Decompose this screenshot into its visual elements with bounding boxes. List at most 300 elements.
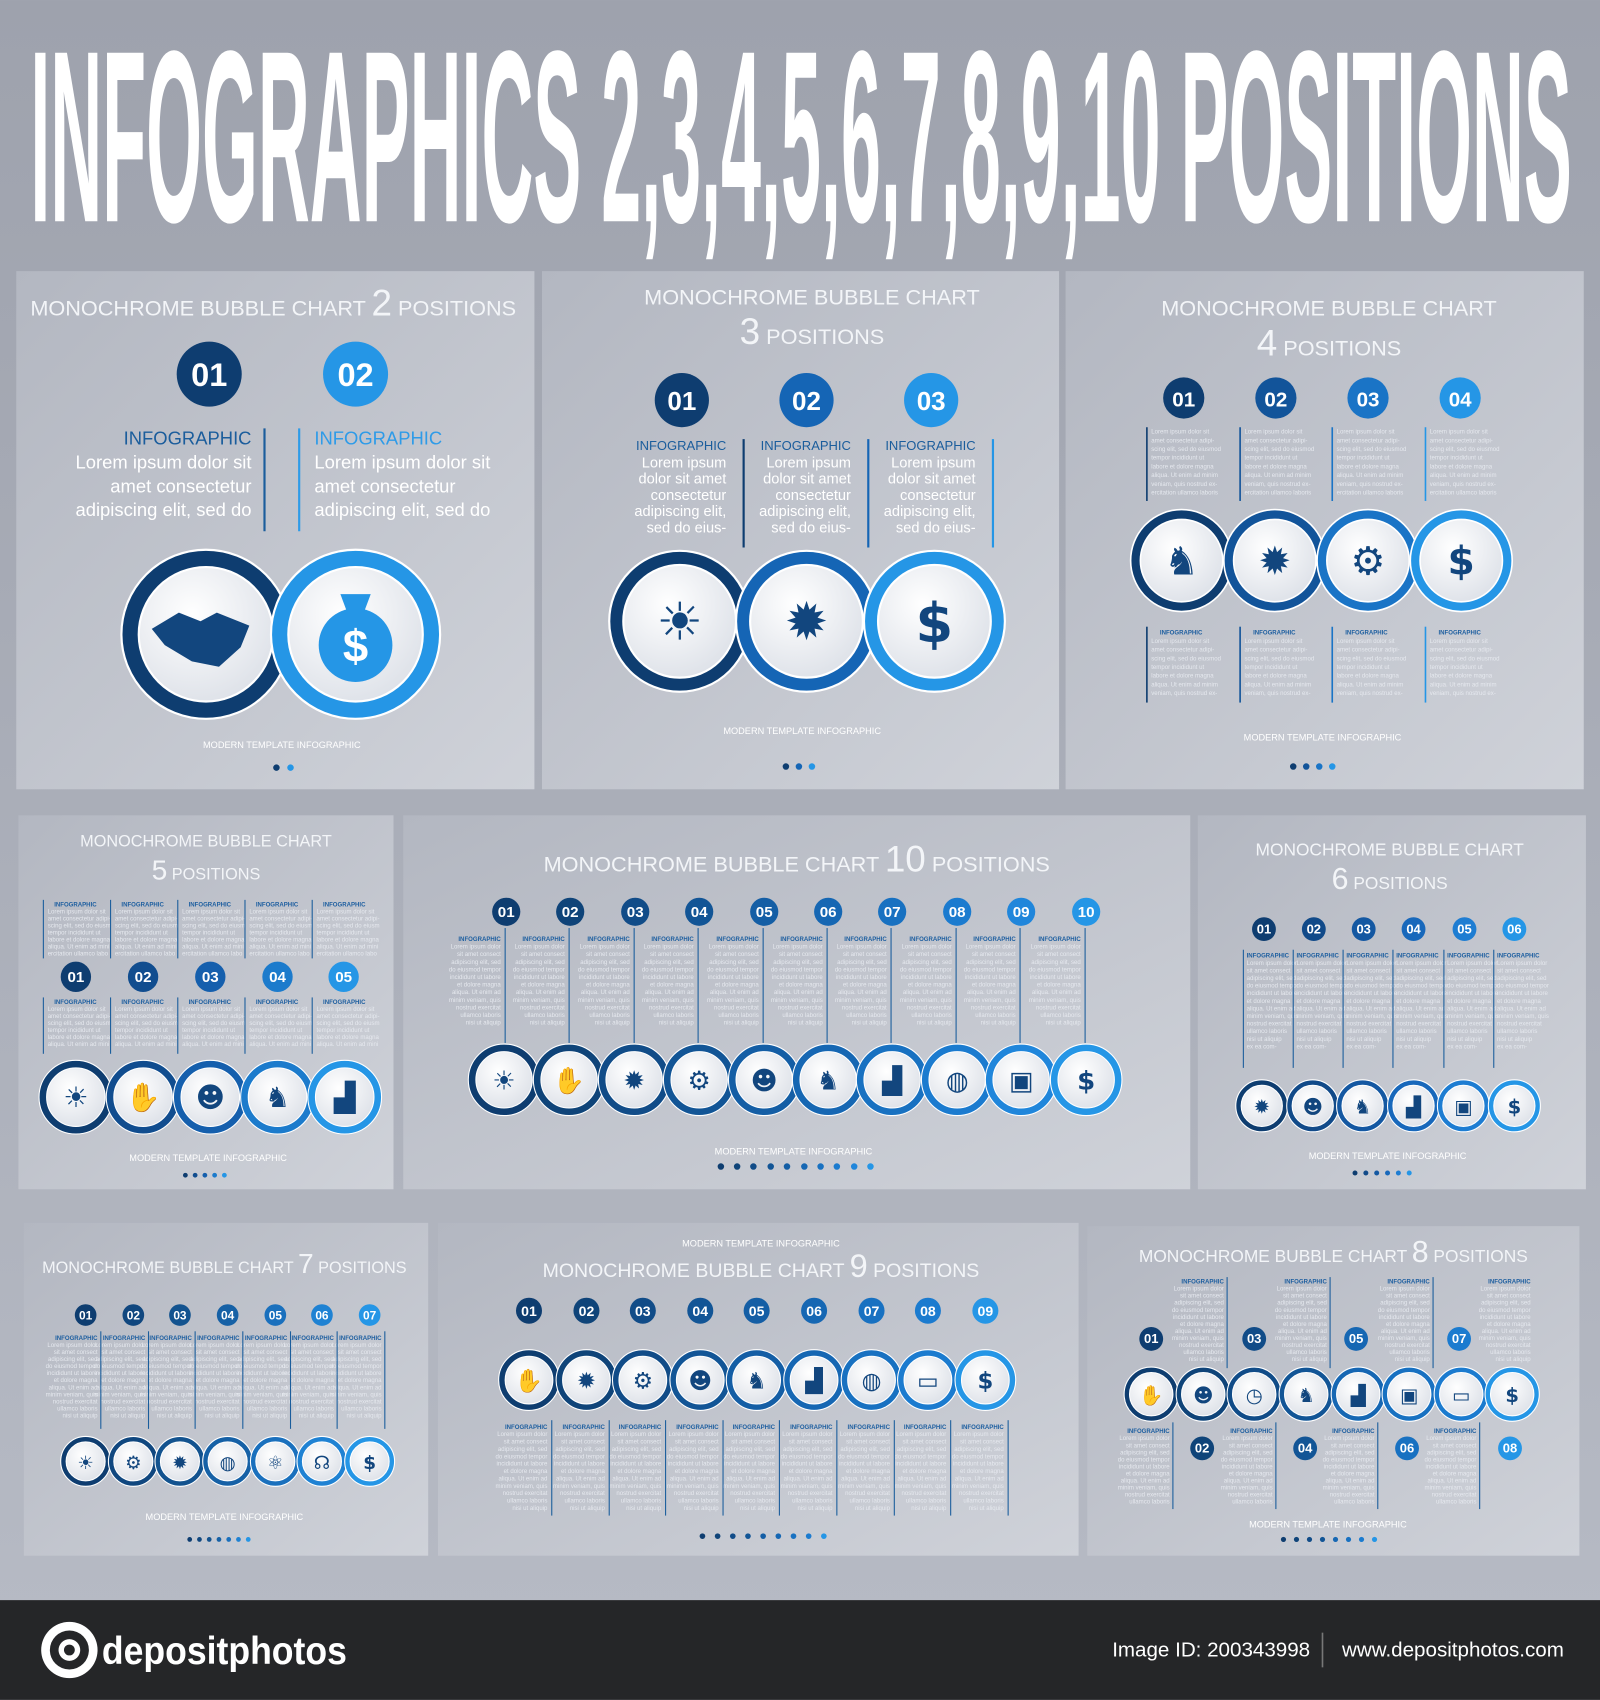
- text blocks 5 bottom: scing elit, sed do eiusm: [48, 1021, 111, 1027]
- text columns 7: INFOGRAPHIC: [55, 1336, 98, 1342]
- text columns 8 bottom: [1118, 1429, 1477, 1506]
- text columns 9: aliqua. Ut enim ad: [670, 1476, 719, 1482]
- badges 10: [492, 898, 1100, 926]
- text blocks 5 top: scing elit, sed do eiusm: [115, 924, 178, 930]
- badges 3: 03: [917, 386, 946, 416]
- panel: 6 positions: [1198, 815, 1586, 1189]
- text columns 6: sit amet consect: [1296, 968, 1341, 974]
- text columns 9: nisi ut aliquip: [684, 1506, 719, 1512]
- text blocks 4 bottom: amet consectetur adipi-: [1151, 648, 1214, 654]
- text columns 7: incididunt ut labore: [236, 1371, 288, 1377]
- text columns 8 bottom: do eiusmod tempor: [1118, 1457, 1170, 1463]
- text columns 8 bottom: ullamco laboris: [1436, 1500, 1476, 1506]
- text columns 8 top: incididunt ut labore: [1379, 1315, 1430, 1321]
- badges 5: 03: [202, 969, 219, 986]
- text blocks 4 bottom: tempor incididunt ut: [1337, 665, 1390, 671]
- text columns 6: aliqua. Ut enim ad: [1396, 1006, 1445, 1012]
- badges 10: 06: [820, 904, 837, 921]
- heading 3: 3 POSITIONS: [740, 311, 884, 352]
- text blocks 5 top: scing elit, sed do eiusm: [249, 924, 312, 930]
- text columns 7: minim veniam, quis: [235, 1392, 287, 1398]
- text columns 10: incididunt ut labore: [901, 975, 952, 981]
- badges 8: 02: [1195, 1441, 1209, 1456]
- text columns 7: nostrud exercitat: [100, 1399, 146, 1405]
- text blocks 5 top: tempor incididunt ut: [249, 931, 303, 937]
- text columns 9: Lorem ipsum dolor: [896, 1432, 946, 1438]
- text columns 6: aliqua. Ut enim ad: [1346, 1006, 1395, 1012]
- text blocks 5 bottom: INFOGRAPHIC: [256, 1000, 299, 1006]
- panel: 10 positions: [403, 815, 1190, 1189]
- text columns 7: adipiscing elit, sed: [238, 1357, 287, 1363]
- bubbles 9: ☻: [688, 1369, 712, 1395]
- text blocks 5 top: amet consectetur adipi-: [115, 916, 178, 922]
- text column 2: adipiscing elit, sed do: [314, 499, 490, 520]
- text columns 10: ullamco laboris: [718, 1013, 759, 1019]
- text columns 7: INFOGRAPHIC: [291, 1336, 334, 1342]
- text columns 9: do eiusmod tempor: [838, 1454, 890, 1460]
- text columns 9: ullamco laboris: [792, 1499, 833, 1505]
- text columns 8 bottom: nostrud exercitat: [1125, 1493, 1170, 1499]
- text columns 8 top: adipiscing elit, sed: [1277, 1301, 1327, 1307]
- text columns 6: minim veniam, quis: [1247, 1014, 1299, 1020]
- text blocks 4 bottom: Lorem ipsum dolor sit: [1244, 639, 1303, 645]
- text blocks 4 bottom: aliqua. Ut enim ad minim: [1430, 682, 1497, 688]
- text columns 10: adipiscing elit, sed: [902, 960, 952, 966]
- text columns 8 top: incididunt ut labore: [1480, 1315, 1531, 1321]
- text columns 7: do eiusmod tempor: [46, 1364, 98, 1370]
- text blocks 4 top: aliqua. Ut enim ad minim: [1151, 473, 1218, 479]
- text columns 10: nisi ut aliquip: [530, 1021, 565, 1027]
- text columns 7: et dolore magna: [54, 1378, 98, 1384]
- text columns 9: nisi ut aliquip: [626, 1506, 662, 1512]
- text blocks 4 bottom: labore et dolore magna: [1337, 674, 1400, 680]
- text columns 10: aliqua. Ut enim ad: [452, 990, 501, 996]
- text columns 10: aliqua. Ut enim ad: [967, 990, 1016, 996]
- badge 02: 02: [337, 357, 374, 393]
- badges 8: 08: [1503, 1441, 1517, 1456]
- text columns 10: Lorem ipsum dolor: [451, 945, 501, 951]
- text blocks 4 top: tempor incididunt ut: [1151, 456, 1204, 462]
- text columns 10: adipiscing elit, sed: [1031, 960, 1081, 966]
- text blocks 5 bottom: Lorem ipsum dolor sit: [182, 1007, 240, 1013]
- badges 10: 01: [498, 904, 515, 921]
- text columns 8 top: aliqua. Ut enim ad: [1381, 1329, 1430, 1335]
- text columns 9: minim veniam, quis: [667, 1484, 719, 1490]
- text columns 7: do eiusmod tempor: [140, 1364, 192, 1370]
- text columns 10: adipiscing elit, sed: [837, 960, 887, 966]
- text columns 7: INFOGRAPHIC: [149, 1336, 192, 1342]
- text blocks 5 bottom: tempor incididunt ut: [182, 1028, 235, 1034]
- text blocks 4 top: veniam, quis nostrud ex-: [1337, 482, 1403, 488]
- text blocks 4 bottom: tempor incididunt ut: [1430, 665, 1483, 671]
- text columns 9: incididunt ut labore: [724, 1462, 776, 1468]
- text columns 7: sit amet consect: [196, 1350, 240, 1356]
- text columns 9: adipiscing elit, sed: [783, 1447, 833, 1453]
- text columns 10: minim veniam, quis: [707, 998, 759, 1004]
- text columns 8 bottom: do eiusmod tempor: [1221, 1457, 1273, 1463]
- text columns 10: ullamco laboris: [589, 1013, 630, 1019]
- text columns 6: do eiusmod tempor: [1346, 984, 1398, 990]
- text columns 10: Lorem ipsum dolor: [902, 945, 952, 951]
- text columns 7: incididunt ut labore: [283, 1371, 334, 1377]
- text columns 8 top: incididunt ut labore: [1173, 1315, 1224, 1321]
- text columns 6: ex ea com-: [1247, 1044, 1277, 1050]
- text columns 10: et dolore magna: [908, 983, 952, 989]
- text columns 8 top: sit amet consect: [1283, 1294, 1327, 1300]
- text columns 9: et dolore magna: [504, 1469, 548, 1475]
- text columns 6: nisi ut aliquip: [1346, 1037, 1382, 1043]
- text columns 7: nisi ut aliquip: [347, 1413, 382, 1419]
- text columns 6: sit amet consect: [1247, 968, 1291, 974]
- text columns 6: ex ea com-: [1497, 1044, 1527, 1050]
- text columns 6: et dolore magna: [1497, 999, 1541, 1005]
- badges 10: 07: [884, 904, 901, 921]
- text columns 7: aliqua. Ut enim ad: [143, 1385, 192, 1391]
- text columns 10: minim veniam, quis: [900, 998, 952, 1004]
- badges 4: 02: [1264, 389, 1287, 412]
- text columns 9: ullamco laboris: [678, 1499, 719, 1505]
- text columns 6: minim veniam, quis: [1497, 1014, 1549, 1020]
- text columns 10: adipiscing elit, sed: [709, 960, 759, 966]
- text columns 8 bottom: adipiscing elit, sed: [1120, 1450, 1170, 1456]
- text columns 8 bottom: incididunt ut labore: [1324, 1464, 1375, 1470]
- text blocks 4 top: aliqua. Ut enim ad minim: [1244, 473, 1311, 479]
- text columns 10: adipiscing elit, sed: [773, 960, 823, 966]
- text columns 10: ullamco laboris: [653, 1013, 694, 1019]
- text columns 10: nisi ut aliquip: [724, 1021, 759, 1027]
- text blocks 4 bottom: scing elit, sed do eiusmod: [1430, 656, 1500, 662]
- text columns 9: INFOGRAPHIC: [790, 1425, 833, 1431]
- text columns 9: do eiusmod tempor: [667, 1454, 719, 1460]
- text columns 9: ullamco laboris: [564, 1499, 605, 1505]
- text columns 8 bottom: Lorem ipsum dolor: [1119, 1436, 1170, 1442]
- text columns 9: incididunt ut labore: [953, 1462, 1004, 1468]
- text columns 10: minim veniam, quis: [578, 998, 630, 1004]
- text columns 9: nisi ut aliquip: [570, 1506, 605, 1512]
- badges 6: 05: [1457, 921, 1472, 936]
- text columns 7: nostrud exercitat: [195, 1399, 240, 1405]
- text columns 6: INFOGRAPHIC: [1296, 953, 1340, 959]
- text columns 10: incididunt ut labore: [514, 975, 565, 981]
- text columns 8 bottom: minim veniam, quis: [1425, 1486, 1476, 1492]
- image id: Image ID: 200343998: [1112, 1639, 1310, 1662]
- text columns 10: aliqua. Ut enim ad: [645, 990, 694, 996]
- badges 4: 01: [1172, 389, 1195, 412]
- text columns 6: Lorem ipsum dolor: [1247, 961, 1297, 967]
- text blocks 4 bottom: tempor incididunt ut: [1151, 665, 1204, 671]
- heading 10: MONOCHROME BUBBLE CHART 10 POSITIONS: [544, 839, 1050, 880]
- text columns 6: incididunt ut labore: [1497, 991, 1549, 997]
- text columns 8 bottom: nostrud exercitat: [1228, 1493, 1273, 1499]
- text columns 7: adipiscing elit, sed: [190, 1357, 240, 1363]
- text blocks 4 top: scing elit, sed do eiusmod: [1430, 447, 1500, 453]
- text columns 6: nostrud exercitat: [1247, 1022, 1292, 1028]
- text columns 10: sit amet consect: [908, 952, 952, 958]
- text columns 10: sit amet consect: [715, 952, 759, 958]
- text blocks 4 bottom: veniam, quis nostrud ex-: [1337, 691, 1403, 697]
- text columns 9: do eiusmod tempor: [609, 1454, 661, 1460]
- bubbles 10: ✹: [623, 1067, 645, 1097]
- heading 7: MONOCHROME BUBBLE CHART 7 POSITIONS: [42, 1247, 407, 1279]
- text columns 7: nisi ut aliquip: [157, 1413, 192, 1419]
- text columns 9: nisi ut aliquip: [855, 1506, 891, 1512]
- text columns 7: adipiscing elit, sed: [48, 1357, 98, 1363]
- text columns 7: minim veniam, quis: [140, 1392, 192, 1398]
- text columns 6: ullamco laboris: [1497, 1029, 1537, 1035]
- text columns 9: nostrud exercitat: [845, 1491, 890, 1497]
- text column 2: amet consectetur: [314, 475, 456, 496]
- text columns 7: nisi ut aliquip: [252, 1413, 288, 1419]
- text columns 10: aliqua. Ut enim ad: [774, 990, 823, 996]
- text columns 10: aliqua. Ut enim ad: [710, 990, 759, 996]
- badges 4: 03: [1357, 389, 1379, 412]
- text columns 9: aliqua. Ut enim ad: [897, 1476, 946, 1482]
- text columns 10: incididunt ut labore: [965, 975, 1016, 981]
- text columns 8 top: INFOGRAPHIC: [1284, 1280, 1327, 1286]
- text blocks 5 bottom: INFOGRAPHIC: [189, 1000, 232, 1006]
- text blocks 4 bottom: INFOGRAPHIC: [1253, 630, 1296, 636]
- text blocks 4 top: ercitation ullamco laboris: [1244, 490, 1311, 496]
- bubbles 5: ☀: [63, 1081, 89, 1114]
- text columns 6: minim veniam, quis: [1447, 1014, 1499, 1020]
- bubbles 9: ◍: [862, 1369, 881, 1395]
- text columns 9: incididunt ut labore: [497, 1462, 548, 1468]
- text columns 6: ullamco laboris: [1396, 1029, 1437, 1035]
- text columns 7: INFOGRAPHIC: [245, 1336, 288, 1342]
- text columns 10: nisi ut aliquip: [852, 1021, 887, 1027]
- badge 02: [323, 342, 388, 407]
- text columns 10: et dolore magna: [715, 983, 759, 989]
- text blocks 5 bottom: Lorem ipsum dolor sit: [48, 1007, 106, 1013]
- text columns 10: sit amet consect: [521, 952, 565, 958]
- text columns 7: Lorem ipsum dolor: [189, 1343, 240, 1349]
- text columns 10: ullamco laboris: [460, 1013, 501, 1019]
- text columns 10: Lorem ipsum dolor: [580, 945, 630, 951]
- text blocks 5 bottom: labore et dolore magna: [249, 1035, 312, 1041]
- text blocks 5 top: Lorem ipsum dolor sit: [115, 909, 173, 915]
- badges 8: 04: [1298, 1441, 1313, 1456]
- text blocks 5 bottom: INFOGRAPHIC: [121, 1000, 164, 1006]
- text columns 3: dolor sit amet: [763, 472, 851, 488]
- text columns 10: aliqua. Ut enim ad: [516, 990, 565, 996]
- badges 3: 02: [792, 386, 821, 416]
- text columns 8 top: nisi ut aliquip: [1189, 1357, 1224, 1363]
- text columns 10: do eiusmod tempor: [835, 967, 887, 973]
- bubbles 10: ☀: [492, 1067, 516, 1097]
- text blocks 4 top: scing elit, sed do eiusmod: [1244, 447, 1314, 453]
- text columns 8 top: INFOGRAPHIC: [1181, 1280, 1224, 1286]
- bubbles 10: [468, 1044, 1122, 1116]
- bubbles 6: ✹: [1254, 1095, 1270, 1118]
- text blocks 4 top: labore et dolore magna: [1430, 464, 1493, 470]
- text columns 9: adipiscing elit, sed: [669, 1447, 719, 1453]
- bubbles 10: ✋: [553, 1066, 585, 1097]
- text columns 10: adipiscing elit, sed: [515, 960, 565, 966]
- text columns 9: minim veniam, quis: [496, 1484, 547, 1490]
- text columns 8 bottom: Lorem ipsum dolor: [1324, 1436, 1375, 1442]
- text columns 7: minim veniam, quis: [93, 1392, 145, 1398]
- text columns 7: aliqua. Ut enim ad: [333, 1385, 382, 1391]
- text blocks 4 bottom: scing elit, sed do eiusmod: [1337, 656, 1406, 662]
- text columns 6: INFOGRAPHIC: [1447, 953, 1490, 959]
- bubble: money bag: [271, 550, 440, 719]
- text columns 10: sit amet consect: [586, 952, 630, 958]
- text columns 6: sit amet consect: [1396, 968, 1440, 974]
- text columns 10: do eiusmod tempor: [578, 967, 630, 973]
- text blocks 4 top: Lorem ipsum dolor sit: [1151, 430, 1209, 436]
- text columns 10: incididunt ut labore: [579, 975, 630, 981]
- text blocks 5 top: INFOGRAPHIC: [323, 902, 366, 908]
- text columns 10: nostrud exercitat: [649, 1005, 694, 1011]
- badge 01: 01: [191, 357, 227, 393]
- footer 5: MODERN TEMPLATE INFOGRAPHIC: [129, 1153, 287, 1163]
- text columns 10: INFOGRAPHIC: [458, 937, 501, 943]
- badges 9: 03: [635, 1303, 651, 1319]
- text columns 9: adipiscing elit, sed: [954, 1447, 1004, 1453]
- bubbles 10: $: [1077, 1067, 1095, 1097]
- text columns 10: et dolore magna: [1037, 983, 1081, 989]
- text columns 9: aliqua. Ut enim ad: [499, 1476, 547, 1482]
- bubbles 3: [609, 551, 1005, 692]
- text column 2: INFOGRAPHIC: [314, 428, 442, 449]
- text columns 6: nisi ut aliquip: [1247, 1037, 1282, 1043]
- badges 3: 01: [667, 386, 696, 416]
- bubbles 10: ⚙: [688, 1067, 711, 1097]
- text columns 10: incididunt ut labore: [1030, 975, 1081, 981]
- panel: 3 positions: [542, 271, 1059, 789]
- text columns 6: aliqua. Ut enim ad: [1447, 1006, 1496, 1012]
- text blocks 5 top: amet consectetur adipi-: [182, 916, 245, 922]
- text columns 9: do eiusmod tempor: [723, 1454, 775, 1460]
- text columns 8 bottom: et dolore magna: [1331, 1471, 1375, 1477]
- text columns 9: Lorem ipsum dolor: [782, 1432, 833, 1438]
- text columns 6: adipiscing elit, sed: [1396, 976, 1446, 982]
- text columns 7: aliqua. Ut enim ad: [285, 1385, 334, 1391]
- text columns 9: aliqua. Ut enim ad: [784, 1476, 833, 1482]
- text columns 7: sit amet consect: [290, 1350, 334, 1356]
- text columns 9: et dolore magna: [731, 1469, 776, 1475]
- text blocks 5 top: scing elit, sed do eiusm: [317, 924, 380, 930]
- text columns 9: nostrud exercitat: [560, 1491, 605, 1497]
- text columns 10: incididunt ut labore: [643, 975, 694, 981]
- text columns 10: sit amet consect: [843, 952, 887, 958]
- footer 6: MODERN TEMPLATE INFOGRAPHIC: [1309, 1151, 1467, 1161]
- text columns 3: sed do eius-: [771, 520, 851, 536]
- text columns 7: aliqua. Ut enim ad: [96, 1385, 145, 1391]
- footer bar: [0, 1600, 1600, 1700]
- text columns 7: aliqua. Ut enim ad: [49, 1385, 98, 1391]
- text blocks 5 bottom: Lorem ipsum dolor sit: [115, 1007, 173, 1013]
- text columns 8 top: [1172, 1280, 1531, 1363]
- text columns 7: nisi ut aliquip: [299, 1413, 334, 1419]
- badges 8: [1139, 1327, 1522, 1460]
- text blocks 4 top: [1151, 430, 1500, 496]
- text columns 8 bottom: aliqua. Ut enim ad: [1428, 1479, 1476, 1485]
- text columns 8 top: Lorem ipsum dolor: [1174, 1287, 1224, 1293]
- heading 4: MONOCHROME BUBBLE CHART: [1161, 296, 1497, 321]
- bubbles 10: ▟: [881, 1065, 903, 1097]
- text columns 6: INFOGRAPHIC: [1247, 953, 1290, 959]
- text columns 6: minim veniam, quis: [1296, 1014, 1348, 1020]
- badges 7: 01: [79, 1308, 93, 1322]
- text blocks 5 bottom: scing elit, sed do eiusm: [317, 1021, 380, 1027]
- text columns 7: nisi ut aliquip: [205, 1413, 240, 1419]
- badges 6: 06: [1507, 921, 1522, 936]
- text blocks 5 bottom: Lorem ipsum dolor sit: [249, 1007, 308, 1013]
- text columns 6: ullamco laboris: [1247, 1029, 1287, 1035]
- text blocks 4 top: amet consectetur adipi-: [1430, 438, 1493, 444]
- text columns 7: nostrud exercitat: [147, 1399, 192, 1405]
- text blocks 4 top: amet consectetur adipi-: [1244, 438, 1307, 444]
- text columns 10: INFOGRAPHIC: [522, 937, 565, 943]
- text columns 9: INFOGRAPHIC: [904, 1425, 947, 1431]
- text columns 8 bottom: aliqua. Ut enim ad: [1326, 1479, 1375, 1485]
- text columns 10: adipiscing elit, sed: [966, 960, 1016, 966]
- text columns 8 top: do eiusmod tempor: [1275, 1308, 1327, 1314]
- bubbles 3: ✹: [785, 593, 828, 653]
- text blocks 4 bottom: amet consectetur adipi-: [1337, 648, 1400, 654]
- text columns 10: minim veniam, quis: [771, 998, 823, 1004]
- heading 9: MONOCHROME BUBBLE CHART 9 POSITIONS: [543, 1248, 979, 1284]
- text columns 8 top: ullamco laboris: [1286, 1350, 1327, 1356]
- text columns 7: ullamco laboris: [199, 1406, 240, 1412]
- text columns 10: nostrud exercitat: [842, 1005, 887, 1011]
- text columns 7: incididunt ut labore: [331, 1371, 382, 1377]
- footer dots 9: [700, 1533, 827, 1539]
- text columns 8 bottom: INFOGRAPHIC: [1434, 1429, 1477, 1435]
- text columns 8 bottom: INFOGRAPHIC: [1332, 1429, 1375, 1435]
- text blocks 5 bottom: aliqua. Ut enim ad mini: [48, 1042, 109, 1048]
- text columns 3: consectetur: [651, 488, 726, 504]
- text blocks 4 bottom: INFOGRAPHIC: [1345, 630, 1388, 636]
- badges 7: [75, 1304, 380, 1326]
- text columns 10: nisi ut aliquip: [917, 1021, 952, 1027]
- bubbles 9: ♞: [746, 1369, 767, 1395]
- text columns 6: adipiscing elit, sed: [1247, 976, 1296, 982]
- heading 8: MONOCHROME BUBBLE CHART 8 POSITIONS: [1139, 1236, 1528, 1269]
- text columns 10: ullamco laboris: [975, 1013, 1016, 1019]
- text columns 9: incididunt ut labore: [554, 1462, 605, 1468]
- text columns 6: ullamco laboris: [1296, 1029, 1337, 1035]
- text blocks 5 top: aliqua. Ut enim ad mini: [317, 945, 378, 951]
- panel: 7 positions: [24, 1223, 428, 1556]
- badges 9: 09: [978, 1303, 993, 1319]
- text columns 9: INFOGRAPHIC: [848, 1425, 891, 1431]
- text blocks 5 top: tempor incididunt ut: [48, 931, 101, 937]
- text blocks 5 top: INFOGRAPHIC: [54, 902, 97, 908]
- bubbles 4: [1131, 510, 1512, 612]
- text columns 10: Lorem ipsum dolor: [644, 945, 694, 951]
- text columns 7: nostrud exercitat: [337, 1399, 382, 1405]
- text columns 8 top: adipiscing elit, sed: [1174, 1301, 1224, 1307]
- text columns 10: INFOGRAPHIC: [844, 937, 887, 943]
- text columns 10: et dolore magna: [843, 983, 887, 989]
- text columns 9: nisi ut aliquip: [911, 1506, 947, 1512]
- text blocks 5 top: labore et dolore magna: [182, 938, 245, 944]
- footer 7: MODERN TEMPLATE INFOGRAPHIC: [146, 1512, 304, 1522]
- text columns 6: ex ea com-: [1396, 1044, 1426, 1050]
- badges 10: 08: [949, 904, 966, 921]
- text columns 8 top: adipiscing elit, sed: [1380, 1301, 1430, 1307]
- text columns 10: minim veniam, quis: [449, 998, 501, 1004]
- text columns 8 bottom: et dolore magna: [1126, 1471, 1170, 1477]
- bubbles 3: ☀: [656, 593, 703, 653]
- bubbles 8: ♞: [1297, 1384, 1315, 1407]
- text columns 6: do eiusmod tempor: [1396, 984, 1448, 990]
- text columns 6: aliqua. Ut enim ad: [1497, 1006, 1546, 1012]
- text columns 6: incididunt ut labore: [1447, 991, 1499, 997]
- badges 9: [516, 1298, 998, 1324]
